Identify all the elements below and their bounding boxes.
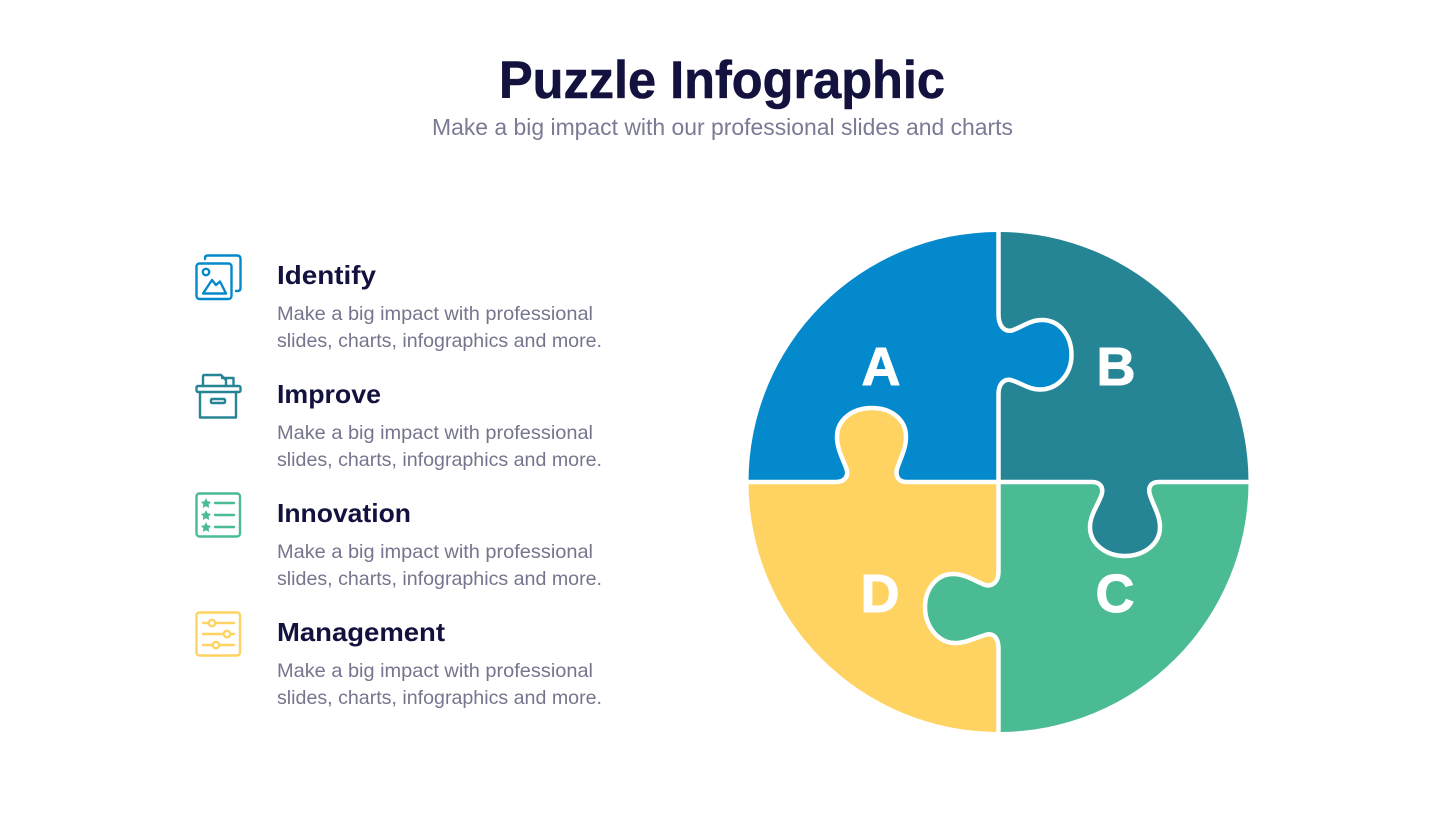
item: Improve [196,375,602,471]
title: Puzzle Infographic [499,51,945,110]
description: Make a big impact with professional [277,303,593,325]
puzzle pieces [740,225,1258,742]
description: slides, charts, infographics and more. [277,449,602,471]
label D: D [860,564,900,624]
description: slides, charts, infographics and more. [277,687,602,709]
label B: B [1096,337,1136,397]
description: slides, charts, infographics and more. [277,330,602,352]
heading: Innovation [277,498,411,528]
item: Identify [196,256,602,352]
heading: Management [277,617,445,647]
heading: Improve [277,379,381,409]
icon: archive box [196,375,240,418]
puzzle circle [740,225,1258,742]
item: Innovation [196,494,602,590]
icon: sliders [196,612,240,656]
description: slides, charts, infographics and more. [277,568,602,590]
label A: A [862,337,900,397]
icon: star checklist [196,494,240,536]
item: Management [196,612,602,709]
description: Make a big impact with professional [277,541,593,563]
description: Make a big impact with professional [277,422,593,444]
label C: C [1096,564,1134,624]
heading: Identify [277,260,377,290]
icon: image gallery [196,256,240,299]
description: Make a big impact with professional [277,660,593,682]
subtitle: Make a big impact with our professional slides and charts [432,114,1013,140]
